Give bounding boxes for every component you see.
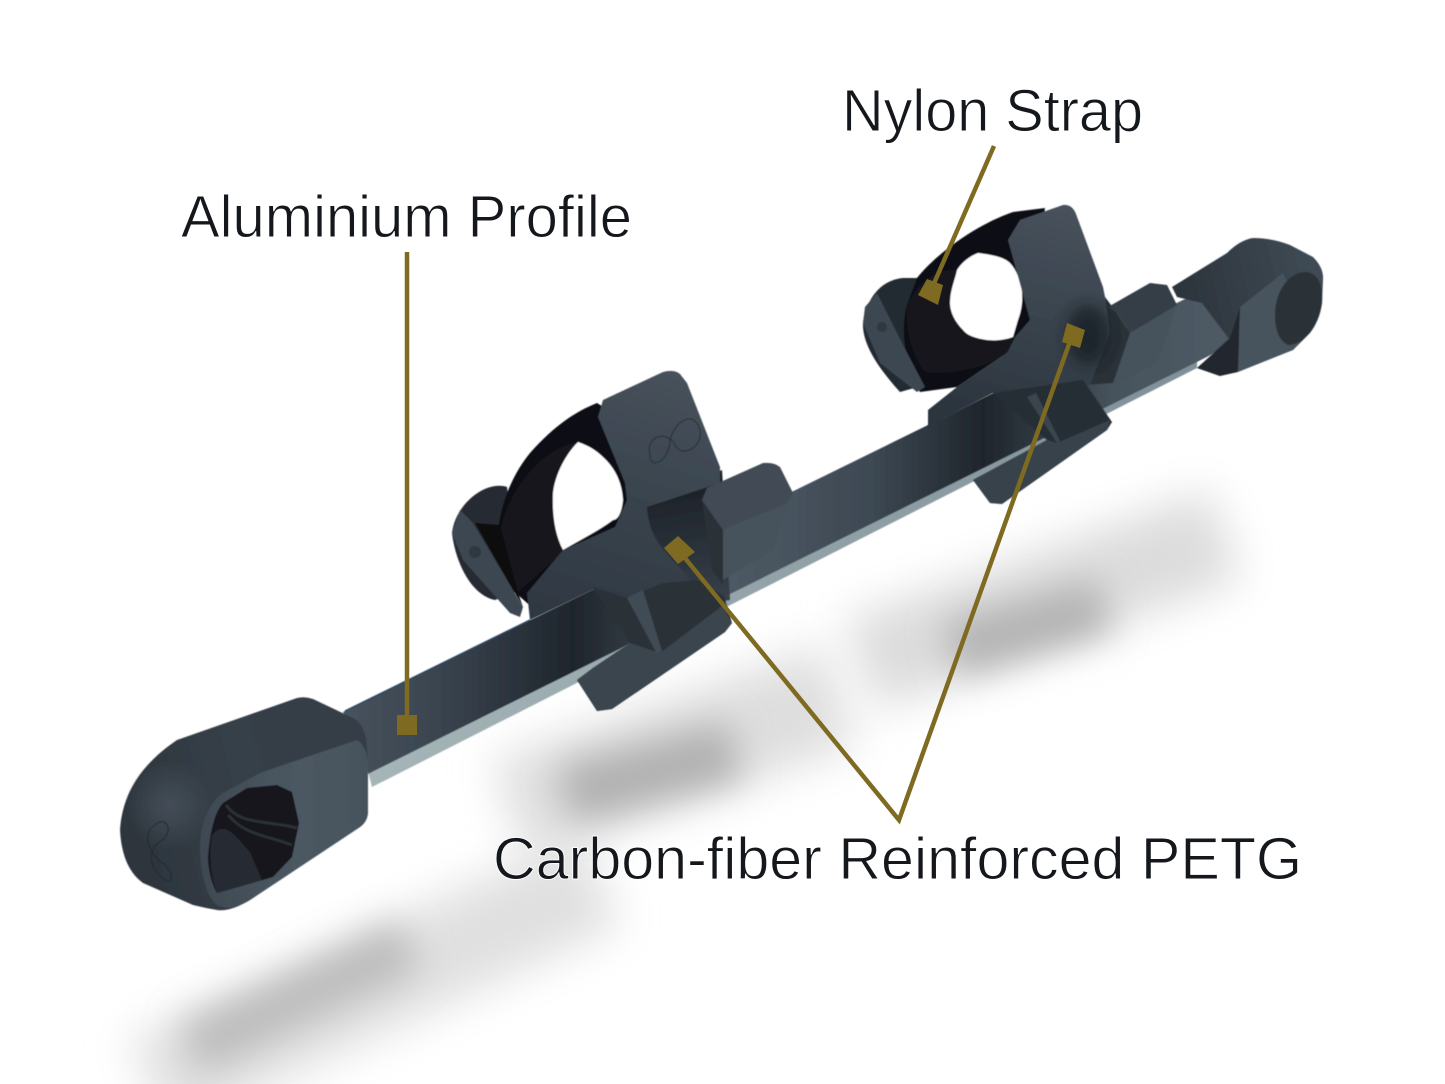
label: Carbon-fiber Reinforced PETG: Carbon-fiber Reinforced PETG	[493, 826, 1302, 892]
rear lower block	[973, 380, 1112, 504]
rear clamp	[863, 205, 1177, 504]
rear recess	[1070, 297, 1130, 385]
label: Aluminium Profile: Aluminium Profile	[181, 184, 632, 250]
rear nylon strap	[904, 208, 1045, 392]
front nylon strap	[498, 403, 640, 610]
end cap: right	[1172, 238, 1323, 376]
front clamp	[452, 371, 793, 711]
rear hollow shading	[1066, 305, 1110, 365]
end cap: left	[120, 697, 368, 910]
rear clamp body	[928, 205, 1110, 427]
socket	[1275, 272, 1322, 345]
leader: carbon-fiber PETG	[664, 323, 1085, 820]
front bracket	[702, 500, 723, 585]
logo: infinity mark	[649, 419, 700, 463]
leader: aluminium profile	[397, 252, 417, 735]
leader: nylon strap	[918, 146, 994, 305]
front lower block	[577, 580, 732, 711]
logo on cap	[148, 822, 171, 881]
aluminium profile bar	[343, 272, 1240, 787]
shadows on the ground	[150, 535, 1225, 1084]
front buckle back	[452, 486, 520, 600]
label: Nylon Strap: Nylon Strap	[842, 78, 1143, 144]
front clamp body	[527, 371, 720, 620]
front buckle plate	[475, 523, 523, 607]
rear buckle back	[863, 278, 925, 392]
front recess	[645, 470, 730, 612]
rear buckle plate	[863, 293, 925, 392]
rear bracket	[1108, 283, 1177, 333]
socket	[208, 785, 299, 893]
